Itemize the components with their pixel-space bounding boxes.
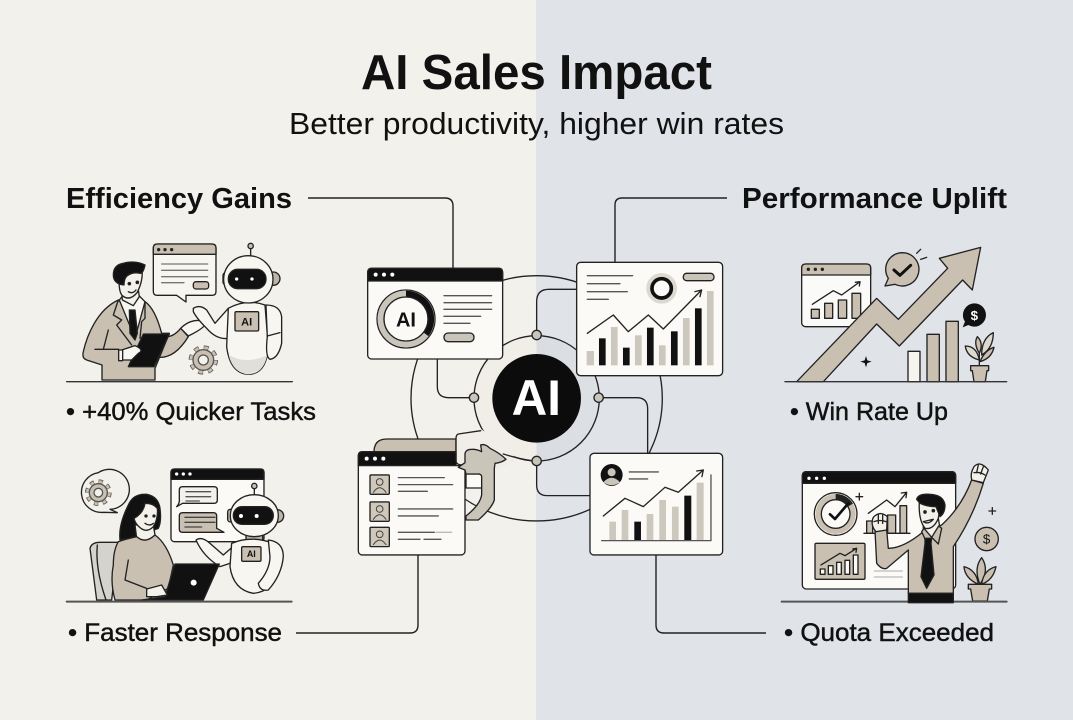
chart window: [802, 264, 871, 327]
icon: plant: [965, 333, 994, 382]
connector lines to headings and bullets: [296, 198, 766, 633]
icon: gear: [191, 348, 215, 372]
celebrating man: [872, 464, 988, 603]
businessman: [83, 262, 169, 380]
woman at laptop: [90, 494, 219, 600]
card: top right chart: [577, 262, 723, 376]
card: AI donut: [368, 268, 503, 359]
outer orbit ring: [411, 276, 662, 521]
businessman forearm: [159, 320, 206, 357]
subtitle: Better productivity, higher win rates: [289, 106, 784, 141]
gear speech bubble: [81, 469, 129, 513]
rising bars: [908, 321, 958, 382]
title: AI Sales Impact: [361, 46, 712, 100]
illustration: woman with laptop and robot: [67, 469, 292, 602]
central AI hub: [358, 262, 723, 555]
hub black circle with AI: [492, 354, 581, 443]
hub ring: [474, 336, 599, 461]
bullet: win rate up: • Win Rate Up: [790, 398, 948, 426]
card: AI donut: AI: [396, 309, 416, 331]
dashboard window: [802, 472, 956, 589]
bullet: faster response: • Faster Response: [68, 619, 282, 647]
hub nodes: [469, 330, 603, 466]
card: people list: [358, 452, 465, 555]
speech bubble window: [153, 244, 216, 302]
bullet: quicker tasks: • +40% Quicker Tasks: [66, 398, 316, 426]
icon: coin: [975, 508, 998, 551]
bullet: quota exceeded: • Quota Exceeded: [784, 619, 994, 647]
hub connectors: [437, 289, 648, 496]
flowing tan band from hub to list card: [456, 429, 532, 520]
illustration: dashboard with coin and plant: [782, 472, 1007, 602]
card: bottom right chart: [590, 453, 723, 555]
hub black circle with AI: AI: [512, 370, 561, 426]
heading: efficiency gains: Efficiency Gains: [66, 183, 292, 215]
check bubble: [885, 249, 927, 286]
icon: dollar bubble: [963, 303, 986, 327]
big arrow: [797, 247, 981, 382]
icon: plant: [964, 558, 996, 601]
icon: dollar bubble: $: [971, 308, 979, 323]
robot: AI: [241, 317, 252, 329]
icon: sparkle: [860, 356, 872, 367]
heading: performance uplift: Performance Uplift: [742, 183, 1007, 215]
chat window: [171, 469, 264, 542]
illustration: rising arrow and bars: [785, 247, 1007, 382]
robot: [193, 243, 282, 374]
icon: coin: $: [983, 532, 991, 547]
robot: [196, 483, 284, 593]
robot: AI: [247, 549, 256, 559]
illustration: businessman with robot: [67, 243, 292, 382]
tan tab behind list card: [374, 439, 456, 455]
